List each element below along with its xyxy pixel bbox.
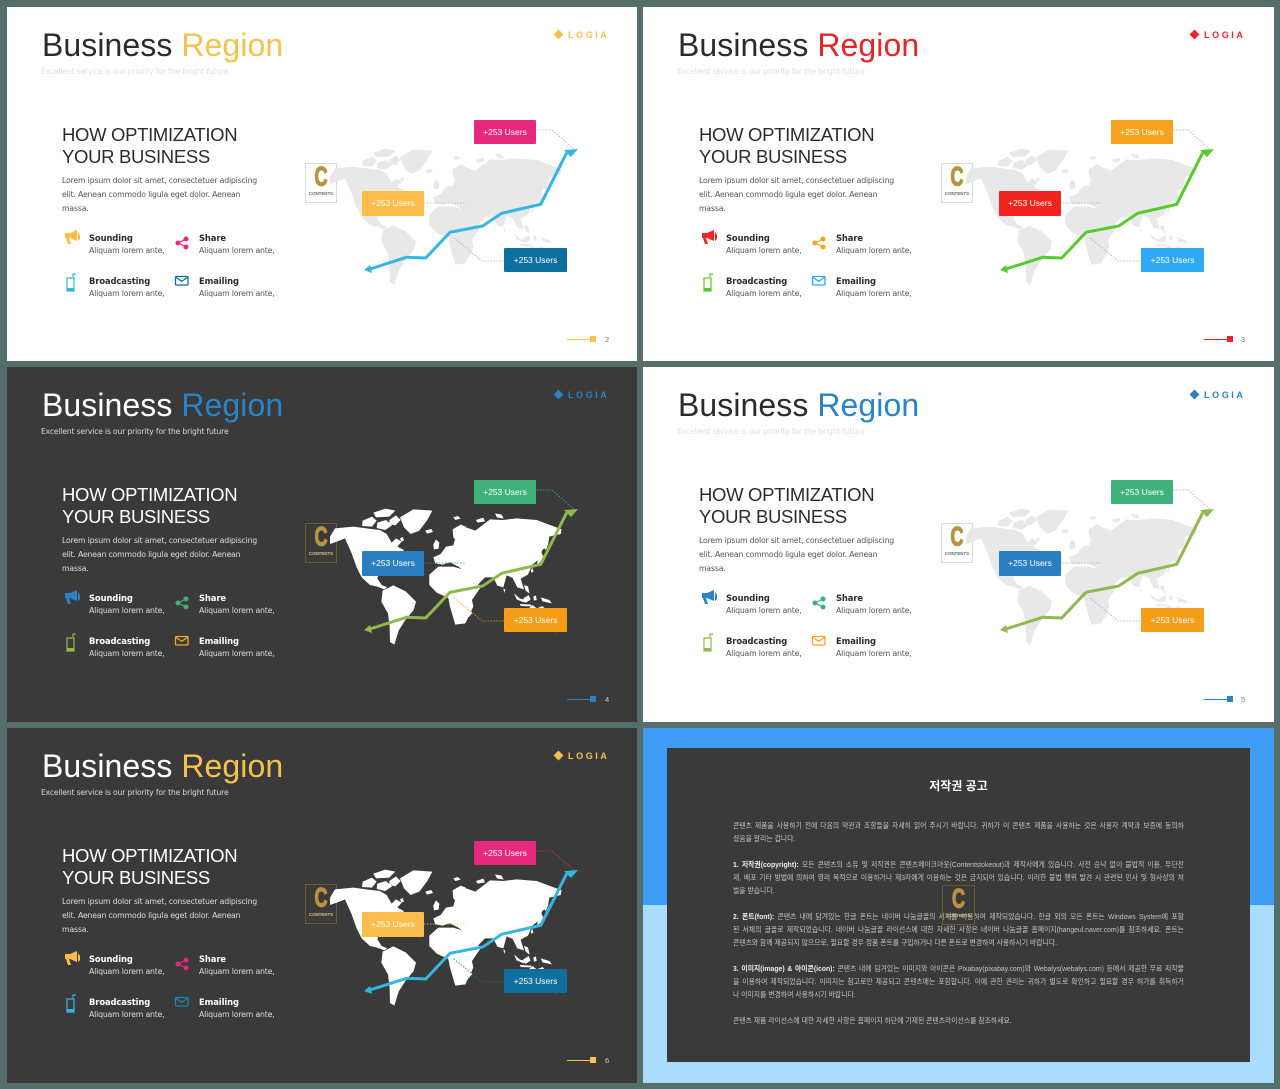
item: emailing: Aliquam lorem ante, [199,1010,275,1019]
item: broadcasting: Aliquam lorem ante, [89,649,165,658]
callout: middle [362,912,424,937]
clause 1: copyright: 재, 배포 기타 방법에 의하여 영리 목적으로 이용하거나 제3자에게 이용하는 것은 금지되어 있습니다. 이러한 불법 행위 발견 시 관련된 민사 및 형사상의 처 [733,873,1184,882]
callout: top: +253 Users [1120,127,1164,137]
paragraph: elit. Aenean commodo ligula eget dolor. Aenean [62,911,240,920]
world map, growth line and connectors [702,130,1214,292]
heading: YOUR BUSINESS [62,506,210,527]
callout: top [474,120,536,144]
heading [699,484,874,527]
heading: YOUR BUSINESS [699,146,847,167]
paragraph: elit. Aenean commodo ligula eget dolor. Aenean [699,190,877,199]
paragraph [62,536,257,573]
callout: top: +253 Users [483,127,527,137]
item: share: Share [199,954,226,964]
heading: YOUR BUSINESS [62,867,210,888]
subtitle: Excellent service is our priority for the bright future [677,67,864,76]
watermark logo: C [314,163,328,192]
item: share [199,593,275,615]
brand logo: LOGIA [568,390,610,400]
callout: middle: +253 Users [371,919,415,929]
title: Business Region [42,387,283,423]
item: emailing: Aliquam lorem ante, [836,649,912,658]
item: sounding: Aliquam lorem ante, [726,606,802,615]
item: sounding: Sounding [89,954,133,964]
page marker [567,336,596,342]
watermark logo: C [950,523,964,552]
item: share: Aliquam lorem ante, [836,606,912,615]
panel: copyright notice background [643,728,1274,1083]
clause 3: image and icon: 3. 이미지(image) & 아이콘(icon): 콘텐츠 내에 담겨있는 이미지와 아이콘은 Pixabay(pixabay.com)와 Webalys(webalys.com) 등에서 제공한 무료 저작물 [733,964,1184,973]
clause 1: copyright: 벌을 받습니다. [733,886,775,895]
clause 2: font: 콘텐츠와 함께 제공되지 않으므로, 필요할 경우 정품 폰트를 구입하거나 다른 폰트로 변경하여 사용하시기 바랍니다. [733,938,1057,947]
item: emailing: Emailing [199,276,239,286]
watermark logo: C [314,884,328,913]
item: emailing: Emailing [199,636,239,646]
panel: slide 2 yellow light [7,7,637,361]
item: share: Share [836,593,863,603]
watermark logo: C [952,885,965,914]
item: sounding [89,593,165,615]
callout: middle: +253 Users [371,198,415,208]
heading: YOUR BUSINESS [699,506,847,527]
item: emailing: Emailing [836,636,876,646]
item: emailing [199,276,275,298]
watermark logo [941,163,973,203]
item: share: Aliquam lorem ante, [199,606,275,615]
heading: HOW OPTIMIZATION [62,124,237,145]
callout: bottom [504,608,567,632]
page number: 3 [1241,335,1245,344]
item: sounding: Aliquam lorem ante, [89,246,165,255]
callout: top [474,480,536,504]
callout: bottom [504,248,567,272]
item: share: Aliquam lorem ante, [199,246,275,255]
item: sounding [89,233,165,255]
clause 3: image and icon [643,962,1274,1001]
heading: HOW OPTIMIZATION [62,845,237,866]
world map, growth line and connectors [65,130,578,292]
watermark logo: C [950,163,964,192]
item: sounding: Sounding [726,593,770,603]
clause 2: font: 2. 폰트(font): 콘텐츠 내에 담겨있는 한글 폰트는 네이버 나눔글꼴의 서체를 이용하여 제작되었습니다. 한글 외의 모든 폰트는 Windows System에 포함 [733,912,1184,921]
item: emailing [199,636,275,658]
intro text [643,819,1274,845]
subtitle: Excellent service is our priority for the bright future [41,427,228,436]
item: share: Share [199,233,226,243]
item: broadcasting: Broadcasting [726,276,787,286]
title: Business Region [42,27,283,63]
subtitle: Excellent service is our priority for the bright future [677,427,864,436]
item: sounding [89,954,184,980]
callout: bottom: +253 Users [514,615,557,625]
item: share: Aliquam lorem ante, [836,246,912,255]
panel: slide 3 red light [643,7,1274,361]
watermark logo: CONTENTS [309,191,333,196]
callout: bottom [504,969,567,993]
paragraph: Lorem ipsum dolor sit amet, consectetuer adipiscing [62,897,257,906]
paragraph [62,895,257,937]
heading [699,124,874,167]
item: share: Share [836,233,863,243]
callout: top: +253 Users [483,487,527,497]
callout: bottom: +253 Users [514,976,557,986]
paragraph: massa. [62,564,89,573]
paragraph: elit. Aenean commodo ligula eget dolor. Aenean [699,550,877,559]
item: share [199,233,275,255]
brand logo: LOGIA [568,30,610,40]
item: emailing: Emailing [836,276,876,286]
heading [62,845,237,889]
watermark logo [942,885,975,925]
brand logo: LOGIA [1204,30,1246,40]
heading: HOW OPTIMIZATION [699,124,874,145]
watermark logo: CONTENTS [945,191,969,196]
item: broadcasting: Aliquam lorem ante, [726,289,802,298]
callout: top: +253 Users [1120,487,1164,497]
item: share: Aliquam lorem ante, [199,967,275,976]
intro text: 셨음을 알리는 겁니다. [733,834,795,843]
item: sounding: Sounding [89,233,133,243]
world map, growth line and connectors [702,490,1214,652]
notice title: 저작권 공고 [929,779,988,793]
page marker [567,1057,597,1063]
item: emailing [199,997,294,1023]
watermark logo: CONTENTS [946,913,971,918]
watermark logo [305,163,337,203]
heading [62,124,237,167]
watermark logo [305,884,337,924]
item: broadcasting: Aliquam lorem ante, [726,649,802,658]
page number: 6 [605,1056,609,1065]
callout: middle: +253 Users [371,558,415,568]
subtitle: Excellent service is our priority for the bright future [41,67,228,76]
heading [62,484,237,527]
callout: top [474,841,536,865]
item: broadcasting: Broadcasting [726,636,787,646]
callout: middle: +253 Users [1008,198,1052,208]
item: broadcasting: Broadcasting [89,276,150,286]
page number: 5 [1241,695,1245,704]
heading: HOW OPTIMIZATION [699,484,874,505]
panel: slide 4 blue dark [7,367,637,722]
item: emailing [836,636,912,658]
page marker [567,696,596,702]
clause 1: copyright: 1. 저작권(copyright): 모든 콘텐츠의 소유 및 저작권은 콘텐츠메이크아웃(Contentstokeout)과 제작사에게 있습니다. 사전 승낙 없이 불법적 이용, 무단전 [733,860,1184,869]
clause 3: image and icon: 을 이용하여 제작되었습니다. 이미지는 참고로만 제공되고 콘텐츠에는 포함합니다. 이에 관한 권리는 귀하가 별도로 확인하고 필요할 경우 허가를 취득하거 [733,977,1184,986]
heading: HOW OPTIMIZATION [62,484,237,505]
item: emailing: Emailing [199,997,239,1007]
callout: middle [362,551,424,576]
item: emailing: Aliquam lorem ante, [199,289,275,298]
callout: middle [999,551,1061,576]
paragraph: massa. [699,564,726,573]
page marker [1204,336,1233,342]
item: sounding: Sounding [89,593,133,603]
item: emailing [836,276,912,298]
page number: 4 [605,695,609,704]
item: broadcasting [89,997,184,1023]
clause 1: copyright [643,858,1274,897]
clause 2: font: 된 서체의 글꼴로 제작되었습니다. 네이버 나눔글꼴 라이선스에 대한 자세한 사항은 네이버 나눔글꼴 홈페이지(hangeul.naver.com)를 참조하세요. 폰트는 [733,925,1184,934]
paragraph: elit. Aenean commodo ligula eget dolor. Aenean [62,190,240,199]
item: broadcasting: Aliquam lorem ante, [89,289,165,298]
paragraph: Lorem ipsum dolor sit amet, consectetuer adipiscing [699,176,894,185]
callout: middle [362,191,424,216]
callout: top [1111,120,1173,144]
paragraph: massa. [699,204,726,213]
item: sounding: Sounding [726,233,770,243]
callout: bottom: +253 Users [514,255,557,265]
item: sounding [726,233,802,255]
callout: top [1111,480,1173,504]
callout: middle [999,191,1061,216]
title: Business Region [678,387,919,423]
paragraph [699,536,894,573]
page number: 2 [605,335,609,344]
world map, growth line and connectors [7,728,637,1083]
brand logo: LOGIA [1204,390,1246,400]
subtitle: Excellent service is our priority for the bright future [41,788,228,797]
callout: top: +253 Users [483,848,527,858]
closing note: 콘텐츠 제품 라이선스에 대한 자세한 사항은 홈페이지 하단에 기재된 콘텐츠라이선스를 참조하세요. [733,1016,1012,1025]
title: Business Region [42,748,283,784]
paragraph: elit. Aenean commodo ligula eget dolor. Aenean [62,550,240,559]
panel: slide 6 yellow dark [7,728,637,1083]
item: emailing: Aliquam lorem ante, [199,649,275,658]
item: emailing: Aliquam lorem ante, [836,289,912,298]
item: broadcasting: Broadcasting [89,636,150,646]
item: share: Share [199,593,226,603]
item: broadcasting [726,636,802,658]
callout: middle: +253 Users [1008,558,1052,568]
item: broadcasting [89,276,165,298]
item: sounding: Aliquam lorem ante, [726,246,802,255]
page marker [1204,696,1233,702]
item: broadcasting [726,276,802,298]
title: Business Region [678,27,919,63]
callout: bottom [1141,608,1204,632]
item: broadcasting [89,636,165,658]
paragraph: Lorem ipsum dolor sit amet, consectetuer adipiscing [62,536,257,545]
item: broadcasting: Broadcasting [89,997,150,1007]
paragraph: massa. [62,925,89,934]
item: sounding [726,593,802,615]
world map, growth line and connectors [65,490,578,652]
paragraph: Lorem ipsum dolor sit amet, consectetuer adipiscing [62,176,257,185]
paragraph: massa. [62,204,89,213]
item: sounding: Aliquam lorem ante, [89,606,165,615]
heading: YOUR BUSINESS [62,146,210,167]
watermark logo: CONTENTS [945,551,969,556]
brand logo: LOGIA [568,751,610,761]
watermark logo [941,523,973,563]
callout: bottom [1141,248,1204,272]
item: share [836,593,912,615]
intro text: 콘텐츠 제품을 사용하기 전에 다음의 약관과 조항들을 자세히 읽어 주시기 바랍니다. 귀하가 이 콘텐츠 제품을 사용하는 것은 사용자 계약과 보증에 동의하 [733,821,1184,830]
notice card [667,748,1250,1062]
item: sounding: Aliquam lorem ante, [89,967,165,976]
clause 2: font [643,910,1274,949]
panel: slide 5 blue light [643,367,1274,722]
watermark logo: CONTENTS [309,551,333,556]
item: share [199,954,294,980]
item: share [836,233,912,255]
watermark logo: CONTENTS [309,912,333,917]
paragraph [699,176,894,213]
item: broadcasting: Aliquam lorem ante, [89,1010,165,1019]
clause 3: image and icon: 나 이미지를 변경하여 사용하시기 바랍니다. [733,990,856,999]
callout: bottom: +253 Users [1151,255,1194,265]
watermark logo [305,523,337,563]
paragraph: Lorem ipsum dolor sit amet, consectetuer adipiscing [699,536,894,545]
watermark logo: C [314,523,328,552]
paragraph [62,176,257,213]
callout: bottom: +253 Users [1151,615,1194,625]
